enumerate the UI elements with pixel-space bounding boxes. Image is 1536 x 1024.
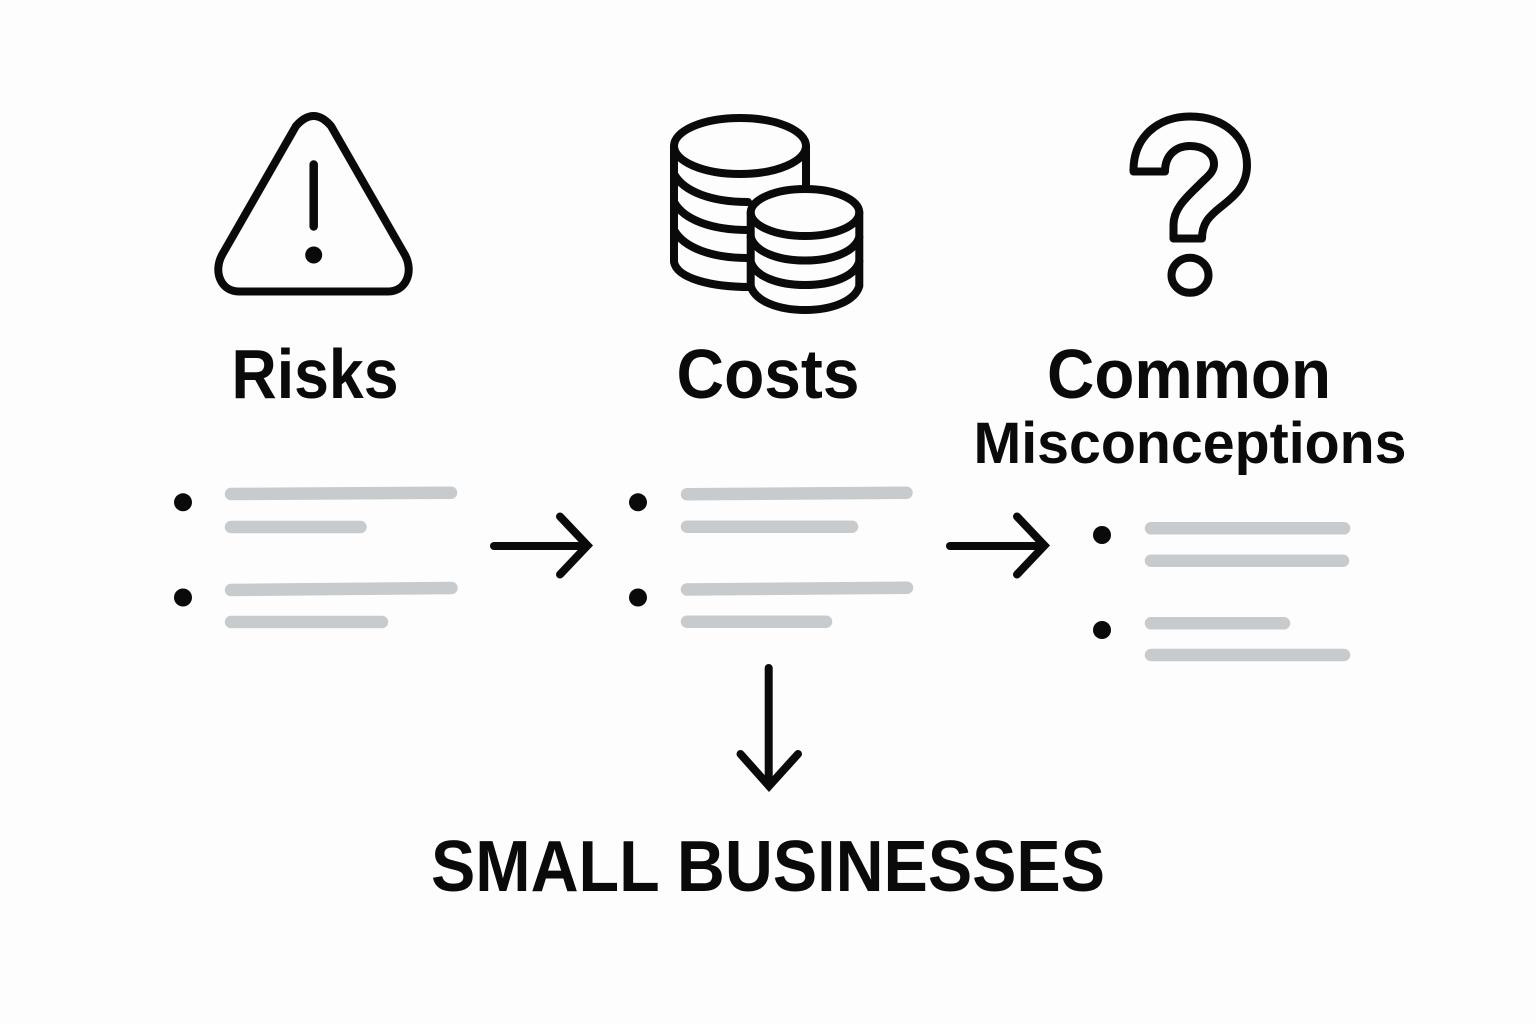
- icon: warning triangle: [218, 116, 409, 292]
- arrow: Costs down to Small Businesses: [740, 668, 798, 786]
- heading: Risks: Risks: [232, 335, 398, 413]
- bullet list: Risks: [174, 493, 452, 622]
- bullet list: Common Misconceptions: [1093, 526, 1344, 655]
- heading: Common Misconceptions: Common: [1047, 335, 1331, 413]
- heading: Costs: Costs: [676, 335, 860, 413]
- arrow: Costs to Common Misconceptions: [950, 516, 1044, 574]
- heading: Common Misconceptions: Misconceptions: [974, 411, 1406, 476]
- bullet list: Costs: [629, 493, 907, 622]
- heading: Common Misconceptions: [974, 335, 1406, 476]
- arrow: Risks to Costs: [494, 516, 588, 574]
- icon: coin stacks: [674, 118, 859, 310]
- icon: question mark: [1133, 116, 1247, 293]
- heading: Small Businesses: SMALL BUSINESSES: [431, 827, 1105, 907]
